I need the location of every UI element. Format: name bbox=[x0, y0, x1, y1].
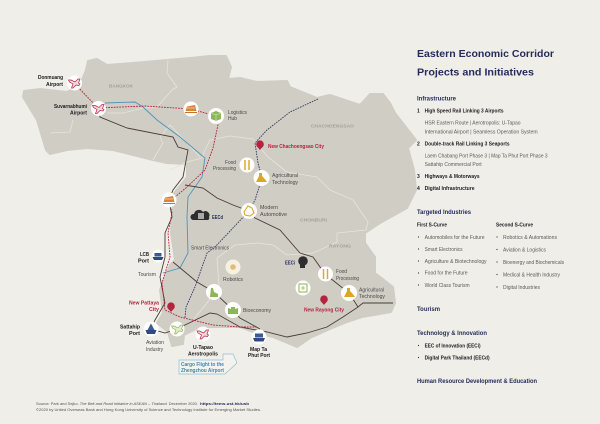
icon: pin New Rayong City bbox=[320, 295, 328, 305]
panel: infrastructure: 1 bbox=[417, 108, 420, 114]
icon: EECd cloud bbox=[190, 210, 209, 220]
map labels: EECi bbox=[285, 260, 296, 266]
map labels: Suvarnabhumi bbox=[54, 104, 88, 110]
title: Projects and Initiatives bbox=[417, 66, 534, 78]
map labels bbox=[38, 75, 386, 359]
icon: high speed train north bbox=[184, 102, 198, 116]
panel: technology and innovation: Digital Park Thailand (EECd) bbox=[425, 355, 490, 361]
panel: targeted industries: Smart Electronics bbox=[425, 247, 463, 253]
panel: infrastructure: International Airport | Seamless Operation System bbox=[425, 129, 538, 135]
panel: targeted industries: First S-Curve bbox=[417, 222, 447, 228]
panel: infrastructure: Laem Chabang Port Phase 3 | Map Ta Phut Port Phase 3 bbox=[425, 153, 548, 159]
heading: tourism: Tourism bbox=[417, 307, 440, 313]
map labels: New Pattaya bbox=[129, 300, 159, 306]
map labels: Agricultural bbox=[359, 288, 384, 294]
icon: bioeconomy bbox=[225, 302, 241, 318]
icon: pin New Pattaya City bbox=[167, 302, 175, 312]
title: Eastern Economic Corridor bbox=[417, 48, 554, 60]
map labels: Modern bbox=[260, 205, 278, 211]
panel: infrastructure: Infrastructure bbox=[417, 97, 457, 103]
panel: infrastructure: 3 bbox=[417, 174, 420, 180]
route: black motorway east bbox=[185, 185, 393, 307]
panel: infrastructure bbox=[417, 97, 548, 192]
icon: Sattahip port ship bbox=[144, 322, 158, 336]
panel: targeted industries: Robotics & Automations bbox=[503, 235, 557, 241]
panel: targeted industries bbox=[417, 210, 564, 291]
panel: targeted industries: Food for the Future bbox=[425, 270, 468, 276]
icon: EECi head bbox=[298, 256, 308, 268]
map labels: EECd bbox=[212, 215, 223, 221]
map labels: CHACHOENGSAO bbox=[311, 123, 354, 128]
panel: infrastructure: 2 bbox=[417, 141, 420, 147]
map labels: Smart Electronics bbox=[191, 246, 229, 252]
map labels: Robotics bbox=[223, 277, 244, 283]
map labels: Port bbox=[138, 258, 149, 264]
icon: Suvarnabhumi airport bbox=[91, 101, 106, 116]
route: black motorway west bbox=[98, 108, 188, 333]
map labels: LCB bbox=[140, 252, 149, 258]
icon: food processing east bbox=[318, 266, 333, 282]
map labels: New Chachoengsao City bbox=[268, 144, 324, 150]
map labels: Map Ta bbox=[250, 347, 267, 353]
map labels: Sattahip bbox=[120, 324, 140, 330]
icon: agricultural technology north bbox=[254, 170, 270, 186]
panel: technology and innovation: Technology & Innovation bbox=[417, 331, 487, 337]
map labels: Airport bbox=[70, 110, 87, 116]
panel: targeted industries: Second S-Curve bbox=[496, 222, 533, 228]
map labels: Aerotropolis bbox=[188, 352, 218, 358]
map labels: Processing bbox=[336, 276, 359, 282]
callout: cargo flight arrow: Cargo Flight to the bbox=[181, 362, 224, 368]
callout: cargo flight arrow: Zhengzhou Airport bbox=[181, 368, 224, 374]
map labels: U-Tapao bbox=[193, 345, 213, 351]
map labels: New Rayong City bbox=[304, 308, 344, 314]
map labels: Logistics bbox=[228, 110, 247, 116]
icon: U-Tapao airport bbox=[196, 326, 210, 342]
map labels: Food bbox=[336, 269, 347, 275]
panel: targeted industries: Aviation & Logistics bbox=[503, 247, 546, 253]
icon: LCB port ship bbox=[152, 250, 164, 262]
panel: infrastructure: Double-track Rail Linking 3 Seaports bbox=[425, 141, 510, 147]
panel: targeted industries: Targeted Industries bbox=[417, 210, 472, 216]
map labels: Food bbox=[225, 160, 236, 166]
map labels: Processing bbox=[213, 166, 236, 172]
panel: targeted industries: Bioenergy and Biochemicals bbox=[503, 260, 564, 266]
icon: robotics bbox=[226, 260, 240, 274]
footer: source and copyright: Source: Park and Sejko. The Belt and Road Initiative in ASEAN – Thailand. December 2020. bbox=[36, 401, 198, 406]
panel: infrastructure: Digital Infrastructure bbox=[425, 186, 475, 192]
panel: targeted industries: World Class Tourism bbox=[425, 283, 470, 289]
map labels: Aviation bbox=[146, 340, 164, 346]
map labels: Bioeconomy bbox=[243, 308, 272, 314]
panel: infrastructure: High Speed Rail Linking 3 Airports bbox=[425, 108, 504, 114]
panel: infrastructure: 4 bbox=[417, 186, 420, 192]
map labels: Airport bbox=[46, 82, 63, 88]
icon: Map Ta Phut port ship bbox=[252, 330, 266, 344]
icon: aviation industry plane bbox=[170, 322, 184, 336]
panel: infrastructure: Sattahip Commercial Port bbox=[425, 162, 482, 168]
map labels: CHONBURI bbox=[300, 218, 327, 223]
route: black link through pharma and bioeconomy bbox=[173, 262, 260, 329]
panel: technology and innovation: EEC of Innovation (EECi) bbox=[425, 343, 481, 349]
panel: infrastructure: HSR Eastern Route | Aerotropolis: U-Tapao bbox=[425, 120, 521, 126]
route: blue river line bbox=[105, 102, 205, 273]
map labels: Port bbox=[129, 331, 140, 337]
icon: digital infrastructure bbox=[296, 280, 310, 296]
map labels: Agricultural bbox=[272, 173, 298, 179]
panel: infrastructure: Highways & Motorways bbox=[425, 174, 480, 180]
map labels: Industry bbox=[146, 347, 163, 353]
footer: source and copyright: ©2020 by United Overseas Bank and Hong Kong University of Science and Technology Institute for Emerging Market Studies. bbox=[36, 407, 261, 412]
icon: Donmuang airport bbox=[67, 76, 82, 90]
footer: source and copyright bbox=[36, 401, 261, 412]
map labels: Tourism bbox=[138, 272, 156, 278]
map labels: City bbox=[149, 307, 159, 313]
route: navy dashed line bbox=[185, 99, 318, 318]
callout: cargo flight arrow bbox=[179, 354, 237, 374]
panel: targeted industries: Digital Industries bbox=[503, 285, 540, 291]
panel: targeted industries: Agriculture & Biotechnology bbox=[425, 259, 487, 265]
footer: source and copyright: https://tems.ust.hk/usb bbox=[200, 401, 250, 406]
icon: pharmaceutical plant bbox=[206, 284, 222, 300]
heading: human resource development: Human Resource Development & Education bbox=[417, 379, 537, 385]
map labels: RAYONG bbox=[329, 244, 351, 249]
map labels: BANGKOK bbox=[109, 84, 134, 89]
title bbox=[417, 48, 554, 78]
map labels: Donmuang bbox=[38, 75, 63, 81]
map labels: Automotive bbox=[260, 212, 287, 218]
icon: modern automotive bbox=[241, 203, 257, 219]
route: red dashed high speed rail bbox=[74, 83, 256, 327]
icon: high speed train south bbox=[162, 192, 176, 208]
panel: targeted industries: Automobiles for the Future bbox=[425, 235, 485, 241]
icon: agricultural technology east bbox=[341, 285, 357, 301]
icon: logistics hub bbox=[208, 108, 224, 124]
panel: technology and innovation bbox=[417, 331, 490, 361]
map labels: Technology bbox=[272, 180, 299, 186]
route: black motorway south bbox=[177, 307, 358, 337]
map labels: Phut Port bbox=[248, 353, 270, 359]
province boundaries bbox=[50, 60, 368, 320]
map: Eastern Economic Corridor region bbox=[23, 56, 416, 347]
icon: pin New Chachoengsao City bbox=[256, 140, 264, 150]
map labels: Technology bbox=[359, 294, 386, 300]
panel: targeted industries: Medical & Health Industry bbox=[503, 272, 560, 278]
map labels: Hub bbox=[228, 116, 237, 122]
icon: food processing north bbox=[240, 158, 254, 172]
